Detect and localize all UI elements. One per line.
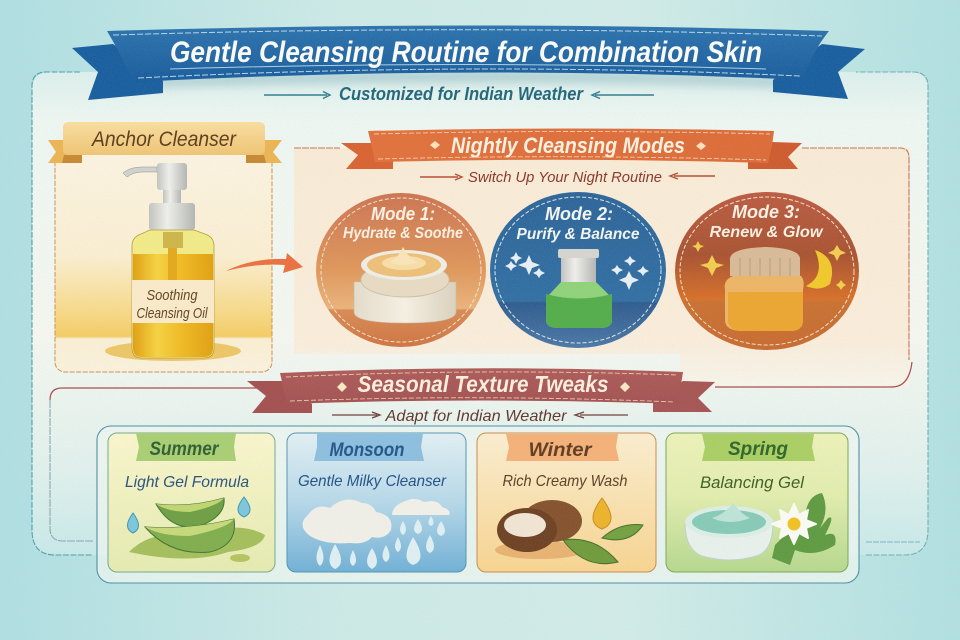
description: winter: Rich Creamy Wash — [502, 473, 628, 490]
tag: winter — [506, 434, 619, 461]
icon: leaves — [563, 525, 643, 564]
mode 3 label: Renew & Glow — [710, 224, 824, 241]
panel: seasonal frame line — [50, 388, 280, 541]
heading: Nightly Cleansing Modes — [451, 133, 685, 158]
mode 2 label — [516, 204, 640, 243]
icon: sparkles — [505, 252, 649, 290]
tag: spring — [702, 434, 815, 461]
mode 1 label: Mode 1: — [371, 204, 435, 224]
label: soothing cleansing oil: Cleansing Oil — [136, 305, 208, 322]
ribbon: nightly modes — [341, 128, 802, 169]
card: spring — [666, 433, 848, 572]
subtitle with arrows: Customized for Indian Weather — [339, 84, 584, 104]
description: summer: Light Gel Formula — [125, 474, 249, 491]
panel: nightly cleansing modes — [294, 128, 909, 387]
label: soothing cleansing oil: Soothing — [146, 287, 198, 304]
card: monsoon — [287, 433, 466, 572]
mode 3 label — [710, 202, 824, 241]
tag: summer — [136, 433, 236, 461]
icon: oil pump bottle — [123, 163, 214, 358]
icon: gel jar — [685, 503, 773, 560]
icon: oil drop — [593, 498, 611, 529]
tag: summer: Summer — [150, 439, 220, 460]
panel: anchor cleanser — [48, 122, 282, 372]
icon: daisy — [772, 504, 816, 544]
diamonds — [337, 382, 630, 392]
card: summer — [108, 433, 275, 572]
outer framing panel — [32, 72, 928, 555]
title banner — [72, 26, 865, 100]
description: spring: Balancing Gel — [700, 473, 805, 492]
description: monsoon: Gentle Milky Cleanser — [298, 473, 447, 490]
mode 3 label: Mode 3: — [732, 202, 800, 222]
mode 2 label: Mode 2: — [545, 204, 613, 224]
icon: shea nuts — [495, 500, 585, 559]
mode 1 badge — [316, 193, 486, 347]
title: Gentle Cleansing Routine for Combination Skin — [170, 36, 762, 69]
panel: seasons container — [97, 426, 859, 583]
icon: cream jar — [354, 247, 456, 323]
arrow: cleanser to modes — [226, 253, 303, 273]
tag: winter: Winter — [528, 440, 593, 461]
sub-heading: adapt for Indian weather — [332, 408, 628, 425]
mode 2 label: Purify & Balance — [516, 226, 640, 243]
tag: monsoon: Monsoon — [330, 440, 404, 461]
mode 3 badge — [675, 192, 859, 350]
subtitle with arrows — [264, 84, 654, 104]
mode 2 badge — [490, 192, 666, 348]
sub-heading: adapt for Indian weather: Adapt for Indian Weather — [384, 408, 567, 425]
icon: golden scrub jar — [725, 247, 804, 331]
icon: aloe slices — [129, 498, 265, 562]
icon: stars — [692, 241, 846, 290]
sub-heading with arrows: Switch Up Your Night Routine — [468, 169, 662, 186]
mode 1 label — [343, 204, 463, 242]
icon: green toner bottle — [546, 249, 612, 328]
icon: water drops — [128, 497, 250, 533]
card: winter — [477, 433, 656, 572]
icon: leaves — [772, 493, 836, 565]
diamonds — [430, 141, 706, 150]
heading: Seasonal Texture Tweaks — [358, 371, 608, 397]
icon: rain clouds — [302, 499, 450, 569]
heading: Anchor Cleanser — [90, 128, 237, 151]
ribbon: anchor cleanser — [48, 122, 282, 163]
icon: crescent moon — [806, 250, 832, 289]
seasonal frame line, right — [715, 362, 912, 387]
tag: monsoon — [314, 434, 424, 461]
label: soothing cleansing oil — [136, 287, 208, 322]
mode 1 label: Hydrate & Soothe — [343, 225, 463, 242]
sub-heading with arrows — [420, 169, 715, 186]
tag: spring: Spring — [728, 439, 788, 460]
ribbon: seasonal texture tweaks — [247, 368, 715, 413]
